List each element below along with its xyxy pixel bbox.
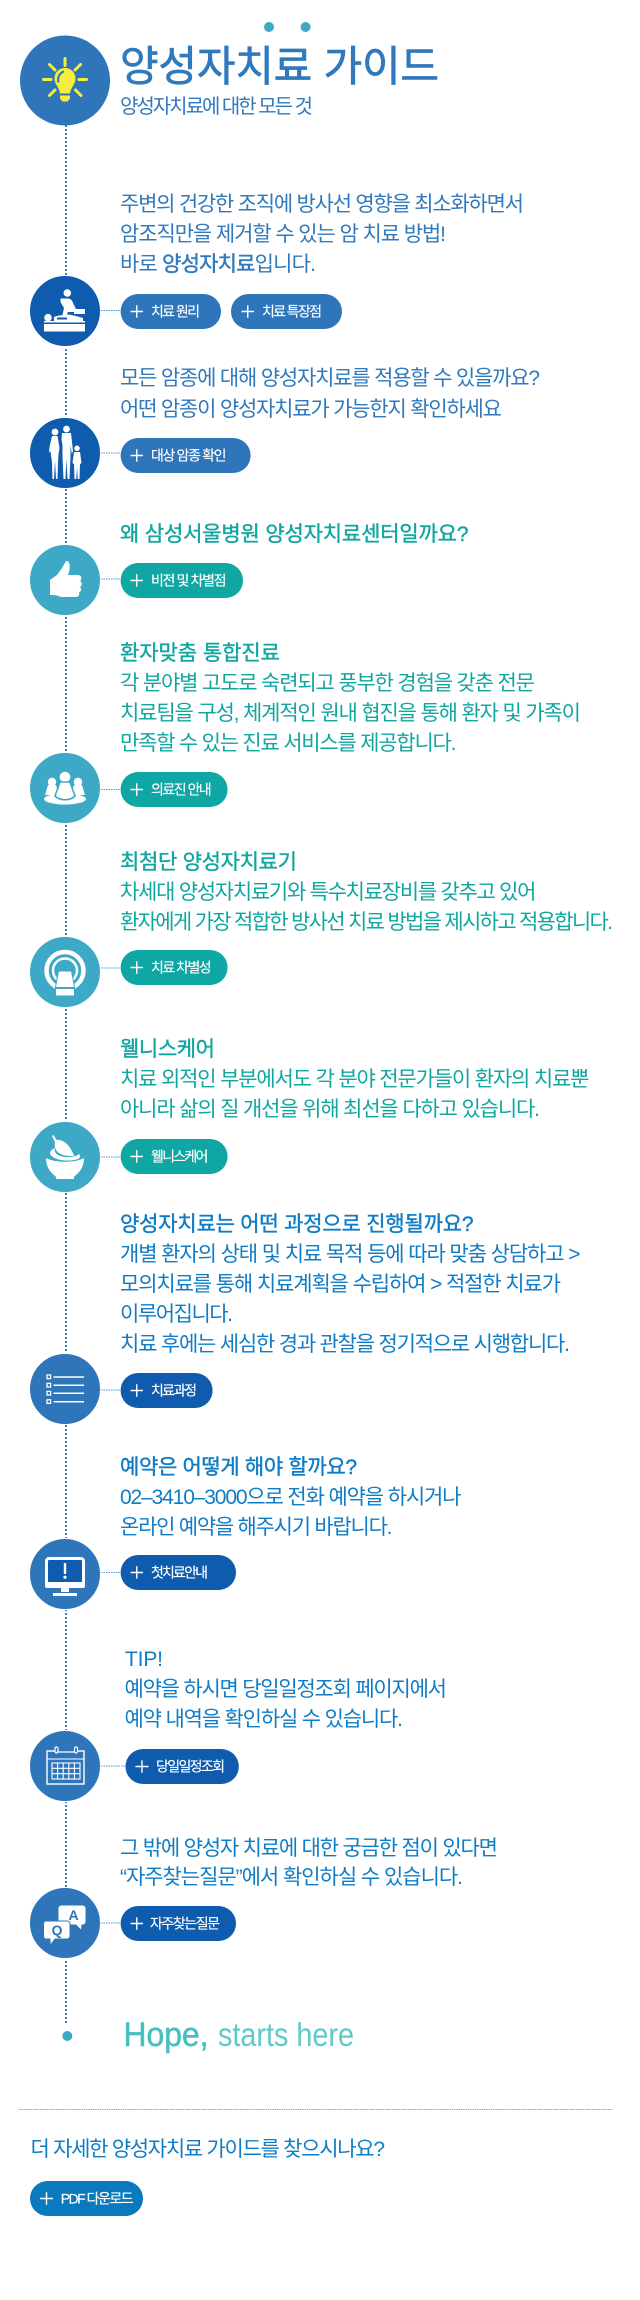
panel: header — [20, 36, 439, 126]
panel: integrated care — [30, 642, 581, 824]
text block: 환자에게 가장 적합한 방사선 치료 방법을 제시하고 적용합니다. — [120, 911, 613, 934]
icon: bowl with leaf — [30, 1122, 100, 1192]
panel: FAQ — [30, 1837, 498, 1958]
connector — [101, 1572, 121, 1574]
icon: proton therapy machine — [30, 936, 100, 1008]
button: 첫치료안내: 첫치료안내 — [151, 1564, 208, 1580]
text block — [120, 1068, 590, 1121]
text block: 더 자세한 양성자치료 가이드를 찾으시나요? — [30, 2138, 385, 2161]
panel: treatment process — [30, 1213, 580, 1424]
text block: 각 분야별 고도로 숙련되고 풍부한 경험을 갖춘 전문 — [120, 672, 535, 695]
connector — [101, 578, 121, 580]
button: 대상 암종 확인 — [121, 438, 251, 473]
icon: checklist — [30, 1354, 100, 1424]
text block: 온라인 예약을 해주시기 바랍니다. — [120, 1516, 392, 1539]
text block — [120, 1837, 498, 1889]
text block: 02–3410–3000으로 전화 예약을 하시거나 — [120, 1486, 462, 1509]
connector — [101, 1156, 121, 1158]
text block — [120, 1486, 462, 1539]
connector — [101, 1389, 121, 1391]
connector — [101, 310, 121, 312]
text block — [120, 1243, 580, 1356]
subtitle: 양성자치료에 대한 모든 것 — [120, 95, 313, 118]
slogan — [124, 2016, 354, 2054]
icon: light bulb — [20, 36, 110, 126]
connector — [101, 1922, 121, 1924]
heading: 웰니스케어 — [120, 1038, 215, 1061]
heading: TIP! — [125, 1648, 163, 1671]
button: PDF 다운로드 — [30, 2181, 143, 2216]
text block: 예약을 하시면 당일일정조회 페이지에서 — [124, 1678, 447, 1701]
icon: question and answer bubbles — [30, 1888, 100, 1958]
icon: question and answer bubbles: Q — [52, 1922, 63, 1938]
button: 의료진 안내 — [121, 772, 228, 807]
connector — [101, 452, 121, 454]
text block: 예약 내역을 확인하실 수 있습니다. — [124, 1708, 403, 1731]
heading: 예약은 어떻게 해야 할까요? — [120, 1456, 357, 1479]
slogan: Hope, — [124, 2016, 208, 2054]
icon: family — [30, 418, 100, 488]
icon: therapy — [30, 276, 100, 346]
button: 자주찾는질문 — [121, 1906, 236, 1941]
button: 웰니스케어 — [121, 1139, 228, 1174]
button: 첫치료안내 — [121, 1555, 236, 1590]
button: 자주찾는질문: 자주찾는질문 — [150, 1916, 220, 1932]
connector — [101, 967, 121, 969]
icon: calendar — [30, 1730, 100, 1802]
text block: 아니라 삶의 질 개선을 위해 최선을 다하고 있습니다. — [120, 1098, 540, 1121]
button: 의료진 안내: 의료진 안내 — [151, 782, 212, 798]
text block — [120, 367, 540, 421]
text block: 어떤 암종이 양성자치료가 가능한지 확인하세요 — [120, 398, 502, 421]
button: PDF 다운로드: PDF 다운로드 — [61, 2190, 134, 2206]
heading: 왜 삼성서울병원 양성자치료센터일까요? — [120, 523, 468, 546]
heading: 양성자치료는 어떤 과정으로 진행될까요? — [120, 1213, 474, 1236]
button: 치료 원리: 치료 원리 — [151, 304, 200, 320]
text block: 바로 양성자치료입니다. — [120, 253, 316, 276]
text block — [120, 881, 613, 934]
text block — [120, 672, 581, 755]
button: 치료과정: 치료과정 — [151, 1382, 197, 1398]
text block: 암조직만을 제거할 수 있는 암 치료 방법! — [120, 223, 446, 246]
panel: proton therapy principle — [30, 193, 524, 346]
connector — [101, 788, 121, 790]
icon: thumbs up — [30, 544, 100, 616]
divider — [19, 2108, 613, 2110]
text block: 치료팀을 구성, 체계적인 원내 협진을 통해 환자 및 가족이 — [120, 702, 581, 725]
text block: 그 밖에 양성자 치료에 대한 궁금한 점이 있다면 — [120, 1837, 498, 1860]
top decorative dots — [264, 22, 311, 32]
text block: 이루어집니다. — [120, 1303, 233, 1326]
panel: reservation — [30, 1456, 462, 1610]
button: 당일일정조회 — [126, 1749, 239, 1784]
text block: 모든 암종에 대해 양성자치료를 적용할 수 있을까요? — [120, 367, 540, 390]
connector — [101, 1765, 126, 1767]
text block: 개별 환자의 상태 및 치료 목적 등에 따라 맞춤 상담하고 > — [120, 1243, 580, 1266]
panel: why Samsung Medical Center — [30, 523, 468, 616]
button: 당일일정조회: 당일일정조회 — [156, 1758, 225, 1774]
text block: 모의치료를 통해 치료계획을 수립하여 > 적절한 치료가 — [120, 1273, 561, 1296]
text block: 주변의 건강한 조직에 방사선 영향을 최소화하면서 — [120, 193, 524, 216]
end dot of timeline — [62, 2031, 72, 2041]
timeline dotted line — [65, 125, 67, 2023]
button: 치료과정 — [121, 1373, 213, 1408]
icon: medical team — [30, 752, 100, 824]
button: 치료 차별성 — [121, 950, 228, 985]
panel: target cancers — [30, 367, 540, 488]
text block: “자주찾는질문”에서 확인하실 수 있습니다. — [120, 1866, 463, 1889]
heading: 환자맞춤 통합진료 — [120, 642, 280, 665]
text block: 차세대 양성자치료기와 특수치료장비를 갖추고 있어 — [120, 881, 536, 904]
text block: 치료 외적인 부분에서도 각 분야 전문가들이 환자의 치료뿐 — [120, 1068, 590, 1091]
panel: advanced equipment — [30, 851, 613, 1008]
slogan: starts here — [218, 2016, 354, 2053]
panel: tip — [30, 1648, 447, 1802]
text block — [120, 193, 524, 276]
panel: wellness care — [30, 1038, 590, 1192]
button: 치료 특장점 — [231, 294, 342, 329]
button: 치료 특장점: 치료 특장점 — [262, 304, 322, 320]
title: 양성자치료 가이드 — [120, 43, 439, 90]
button: 비전 및 차별점 — [121, 563, 243, 598]
button: 치료 차별성: 치료 차별성 — [151, 960, 212, 976]
panel: PDF guide — [30, 2138, 385, 2216]
text block — [124, 1678, 447, 1731]
icon: monitor — [30, 1538, 100, 1610]
heading: 최첨단 양성자치료기 — [120, 851, 297, 874]
button: 대상 암종 확인: 대상 암종 확인 — [151, 448, 226, 464]
button: 웰니스케어: 웰니스케어 — [151, 1148, 208, 1164]
button: 치료 원리 — [121, 294, 221, 329]
icon: question and answer bubbles: A — [68, 1907, 79, 1923]
text block: 치료 후에는 세심한 경과 관찰을 정기적으로 시행합니다. — [120, 1333, 570, 1356]
text block: 만족할 수 있는 진료 서비스를 제공합니다. — [120, 732, 456, 755]
button: 비전 및 차별점: 비전 및 차별점 — [151, 572, 226, 588]
